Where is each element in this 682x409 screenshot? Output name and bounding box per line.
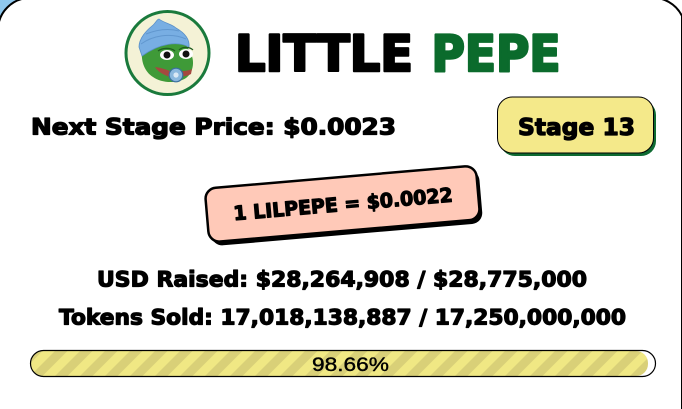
pacifier (169, 68, 183, 82)
hat folds (141, 30, 186, 44)
corner background (0, 0, 24, 24)
price tag: 1 LILPEPE = $0.0022 (232, 184, 454, 225)
next stage price: Next Stage Price: $0.0023 (31, 114, 396, 140)
stage badge (498, 97, 656, 156)
title: LITTLE (235, 25, 413, 83)
stage badge: Stage 13 (518, 113, 635, 141)
usd raised: USD Raised: $28,264,908 / $28,775,000 (97, 268, 587, 292)
frog head (142, 43, 193, 82)
logo (126, 12, 209, 94)
price tag (205, 165, 483, 246)
progress bar (30, 350, 656, 376)
mouth (155, 67, 192, 77)
logo badge (126, 12, 209, 94)
blue hat (139, 19, 189, 56)
title: PEPE (432, 25, 560, 83)
eyes (158, 47, 193, 60)
title (235, 25, 560, 83)
tokens sold: Tokens Sold: 17,018,138,887 / 17,250,000,000 (59, 306, 626, 330)
progress bar: 98.66% (312, 355, 389, 376)
